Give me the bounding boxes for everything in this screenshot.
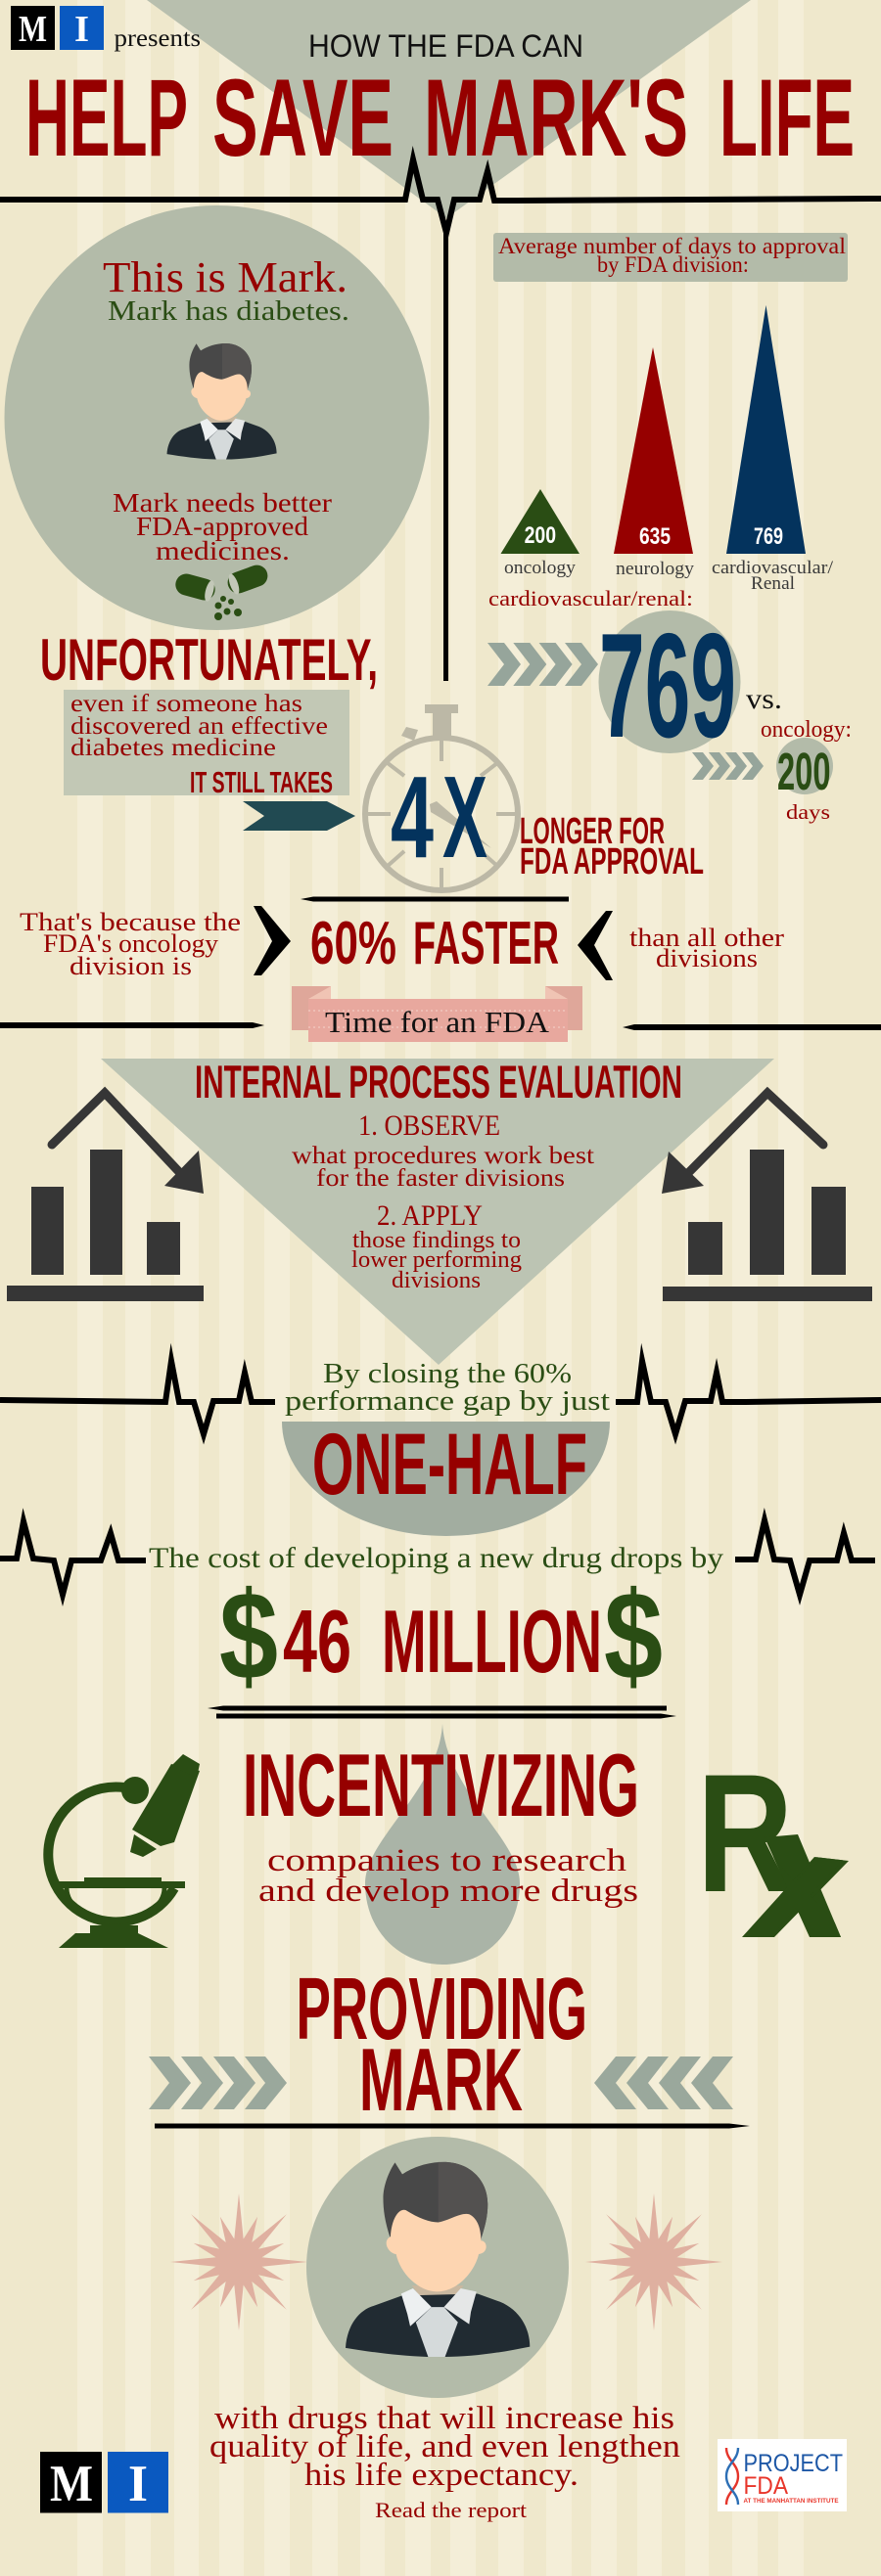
logo: Project FDA: AT THE MANHATTAN INSTITUTE <box>744 2498 839 2505</box>
text: companies to research: companies to research <box>267 1843 627 1878</box>
text box: even if someone has discovered: even if someone has <box>70 691 302 717</box>
icon: microscope <box>48 1754 200 1948</box>
text box: even if someone has discovered <box>64 690 349 799</box>
logo: MI bottom <box>40 2452 168 2512</box>
heartbeat line: cost left <box>0 1521 146 1595</box>
callout: one-half <box>282 1415 610 1536</box>
icon: Rx <box>706 1775 849 1937</box>
logo: Project FDA <box>718 2439 847 2511</box>
heartbeat line: left <box>0 1361 275 1434</box>
heading: $46 million <box>219 1566 663 1706</box>
logo: MI top <box>11 6 104 50</box>
bar: oncology 200 <box>501 489 580 578</box>
heading: unfortunately: UNFORTUNATELY, <box>40 627 378 693</box>
step 1: observe <box>292 1109 594 1192</box>
text: than all other divisions <box>629 924 784 972</box>
chart heading box: by FDA division: <box>597 252 749 277</box>
heading: $46 million: $ <box>219 1566 278 1706</box>
text: cardiovascular/renal label: cardiovascular/renal: <box>488 586 693 610</box>
arrow: to stopwatch <box>243 801 355 831</box>
bar: cardiovascular/renal 769: 769 <box>754 523 783 550</box>
callout: 769 days <box>487 603 740 769</box>
heading: providing Mark <box>296 1961 587 2130</box>
icon: starburst right <box>585 2193 722 2330</box>
heading: 60% faster: FASTER <box>413 910 559 977</box>
icon: bar chart right with arrow <box>662 1093 872 1301</box>
text: by closing the gap: By closing the 60% <box>323 1358 572 1389</box>
chevrons: left <box>149 2056 287 2109</box>
portrait: Mark large <box>306 2137 569 2398</box>
number: 4X: 4 <box>391 752 434 882</box>
text: Mark needs better medicines <box>113 488 332 565</box>
text: longer for FDA approval <box>520 811 704 882</box>
text: with drugs that will increase <box>209 2401 680 2493</box>
bar: cardiovascular/renal 769 <box>712 305 834 594</box>
callout: oncology 200 days: oncology: <box>761 717 852 743</box>
heading: $46 million: $ <box>604 1566 663 1706</box>
callout: one-half: ONE-HALF <box>312 1415 587 1513</box>
text box: even if someone has discovered: discovered an effective <box>70 713 328 740</box>
logo: MI bottom: M <box>50 2456 93 2512</box>
heading: providing Mark: MARK <box>359 2031 523 2130</box>
bar: oncology 200: 200 <box>525 522 556 549</box>
text: presents: presents <box>114 25 201 52</box>
text: that's because: That's because the <box>20 908 241 936</box>
main title <box>25 57 855 179</box>
step 1: observe: 1. OBSERVE <box>358 1109 500 1142</box>
text: with drugs that will increase: quality of life, and even lengthen <box>209 2429 680 2464</box>
bar: neurology 635 <box>614 347 695 579</box>
bar: oncology 200: oncology <box>504 558 577 578</box>
main title: MARK'S <box>424 57 688 179</box>
heading: $46 million: MILLION <box>382 1593 602 1692</box>
heading: this is Mark: This is Mark. <box>103 253 348 301</box>
link text: read the report: Read the report <box>375 2498 527 2522</box>
text: than all other divisions: divisions <box>656 944 758 972</box>
panel: average days to approval chart <box>493 233 848 594</box>
text: companies to research: and develop more drugs <box>258 1874 638 1909</box>
callout: oncology 200 days: days <box>786 800 830 824</box>
heading: 60% faster <box>310 910 559 977</box>
icon: spilled pills <box>173 562 270 620</box>
heartbeat line: cost right <box>735 1520 875 1595</box>
chevrons: toward 769 <box>487 643 598 686</box>
text: vs: vs. <box>746 683 782 715</box>
step 2: apply: 2. APPLY <box>377 1199 483 1232</box>
main title: HELP <box>25 57 188 179</box>
icon: drop <box>365 1724 520 1965</box>
chart heading box <box>493 233 848 282</box>
bar: cardiovascular/renal 769: cardiovascular/ <box>712 558 834 578</box>
icon: Rx: x <box>741 1800 850 1970</box>
text: Mark needs better medicines: Mark needs better <box>113 488 332 518</box>
text: with drugs that will increase: his life expectancy. <box>304 2458 579 2493</box>
text: than all other divisions: than all other <box>629 924 784 952</box>
icon: Rx: R <box>697 1740 793 1927</box>
text: that's because: FDA's oncology <box>43 929 218 958</box>
panel: internal process evaluation <box>101 1057 774 1365</box>
logo: MI top: I <box>74 9 89 50</box>
icon: bar chart left with arrow <box>7 1093 204 1301</box>
text box: even if someone has discovered: IT STILL TAKES <box>190 765 333 799</box>
text: by closing the gap <box>285 1358 610 1417</box>
title kicker: HOW THE FDA CAN <box>308 28 583 64</box>
background triangle: header <box>147 0 751 218</box>
step 1: observe: what procedures work best <box>292 1143 594 1169</box>
logo: Project FDA: FDA <box>744 2472 788 2500</box>
text: longer for FDA approval: FDA APPROVAL <box>520 841 704 882</box>
panel: this is Mark <box>4 205 429 630</box>
icon: DNA helix <box>726 2448 738 2505</box>
text: with drugs that will increase: with drugs that will increase his <box>214 2401 674 2436</box>
icon: chevron right <box>254 906 291 975</box>
step 1: observe: for the faster divisions <box>316 1165 565 1192</box>
logo: Project FDA: PROJECT <box>744 2450 843 2477</box>
ribbon: time for an FDA: Time for an FDA <box>325 1005 550 1039</box>
icon: chevron left <box>578 911 613 980</box>
main title: SAVE <box>212 57 394 179</box>
text: Mark needs better medicines: medicines. <box>156 536 290 565</box>
chart heading box: Average number of days to approval <box>498 234 846 258</box>
bar: neurology 635: neurology <box>616 559 695 579</box>
number: 4X: X <box>442 752 487 882</box>
logo: MI top: M <box>19 9 47 50</box>
text: companies to research <box>258 1843 638 1909</box>
icon: Mark small portrait <box>167 343 277 460</box>
icon: stopwatch with 4X <box>365 704 518 890</box>
heartbeat line: header <box>0 159 881 681</box>
text: longer for FDA approval: LONGER FOR <box>520 811 665 852</box>
logo: MI bottom: I <box>128 2456 148 2512</box>
text: Mark has diabetes: Mark has diabetes. <box>108 295 349 327</box>
text: that's because <box>20 908 241 980</box>
text: by closing the gap: performance gap by just <box>285 1385 610 1417</box>
step 2: apply <box>351 1199 522 1293</box>
callout: oncology 200 days <box>692 717 852 824</box>
bar: cardiovascular/renal 769: Renal <box>751 573 795 594</box>
callout: oncology 200 days: 200 <box>777 743 830 801</box>
text: Mark needs better medicines: FDA-approved <box>136 512 309 541</box>
number: 4X <box>391 752 487 882</box>
chevrons: right <box>594 2056 733 2109</box>
step 2: apply: lower performing <box>351 1247 522 1273</box>
text: that's because: division is <box>70 952 192 980</box>
heading: $46 million: 46 <box>283 1593 351 1692</box>
heading: incentivizing: INCENTIVIZING <box>243 1737 639 1835</box>
icon: starburst left <box>170 2193 307 2330</box>
number: 769: 769 <box>599 603 736 769</box>
heading: providing Mark: PROVIDING <box>296 1961 587 2058</box>
text: cost of developing: The cost of developing a new drug drops by <box>149 1542 723 1574</box>
step 2: apply: divisions <box>392 1268 481 1293</box>
heartbeat line: right <box>616 1361 881 1434</box>
text box: even if someone has discovered: diabetes medicine <box>70 735 276 761</box>
bar: neurology 635: 635 <box>639 523 671 550</box>
step 2: apply: those findings to <box>352 1228 521 1253</box>
heading: 60% faster: 60% <box>310 910 396 977</box>
ribbon: time for an FDA <box>292 986 582 1042</box>
